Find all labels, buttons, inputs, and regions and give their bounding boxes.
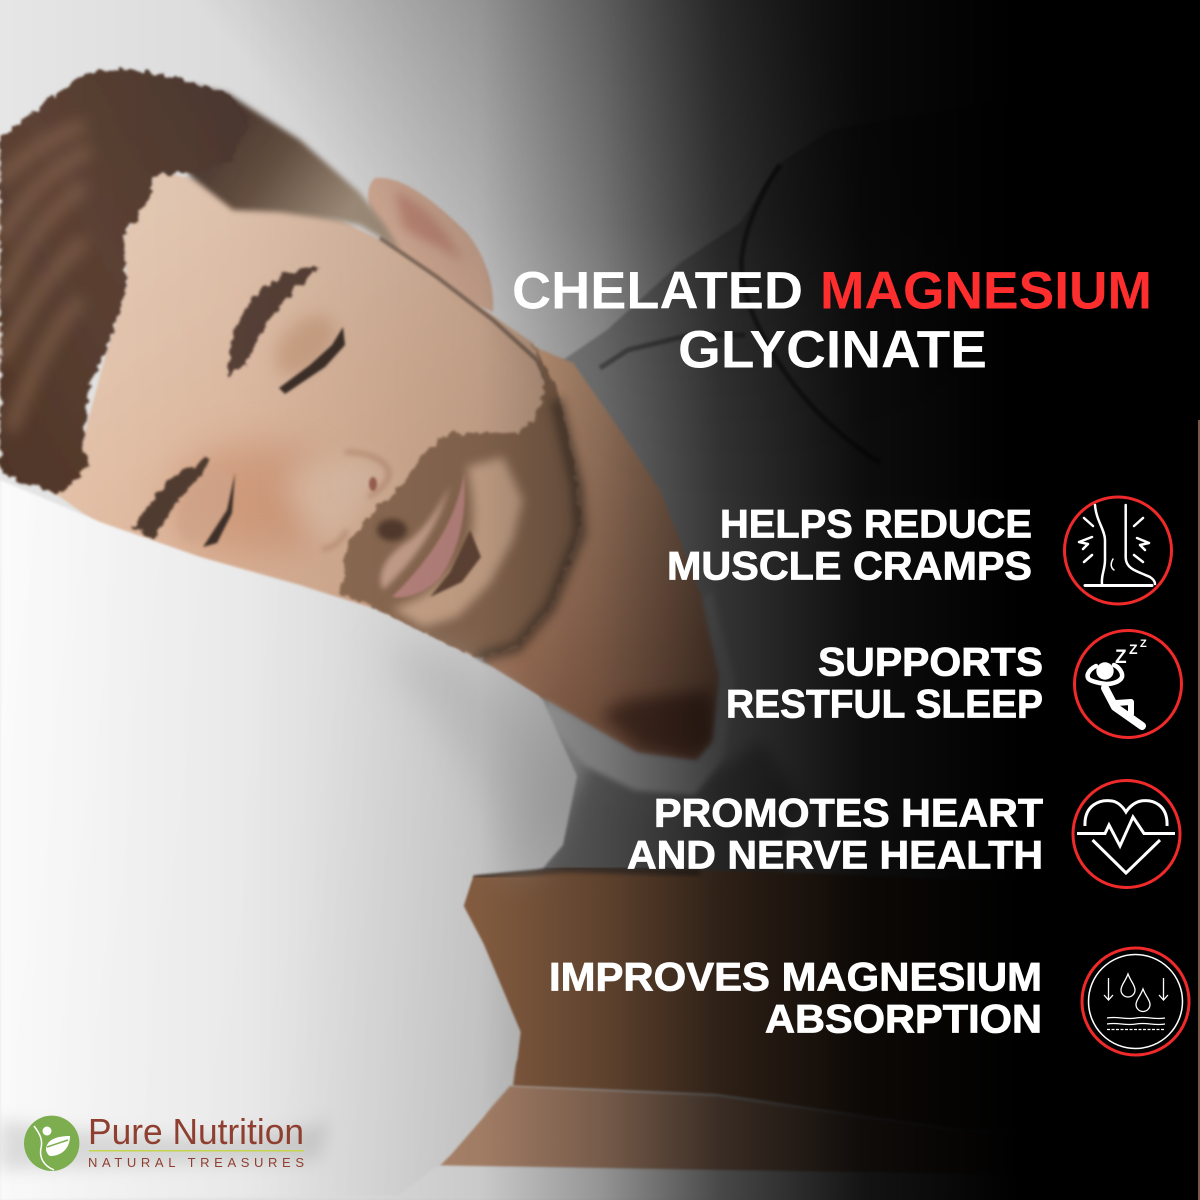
- moustache dark patch: [377, 519, 407, 541]
- ear: [368, 178, 493, 312]
- upper eyebrow: [228, 267, 320, 375]
- icon: sleeping person: [1074, 630, 1182, 738]
- top dark gradient overlay: [238, 0, 884, 338]
- benefit: heart and nerve health: AND NERVE HEALTH: [627, 834, 1043, 878]
- pillow shading: [380, 650, 570, 880]
- lower eye lashes: [203, 473, 235, 547]
- title: [512, 262, 1152, 380]
- icon: sleeping person: Z: [1115, 647, 1127, 668]
- upper eye lashes: [279, 327, 345, 394]
- goatee: [430, 530, 481, 597]
- icon: heart with pulse: [1073, 780, 1180, 888]
- collar band: [545, 590, 735, 795]
- logo divider: [89, 1150, 304, 1152]
- pillow: [0, 480, 577, 1200]
- benefit: restful sleep: [726, 640, 1043, 726]
- nose: [285, 456, 386, 545]
- lower eyebrow: [133, 457, 210, 540]
- nostril: [369, 477, 377, 491]
- beard dark outer edge: [477, 400, 580, 658]
- benefit: muscle cramps: HELPS REDUCE: [720, 502, 1032, 546]
- arm top shadow: [473, 869, 700, 876]
- logo mark: [24, 1116, 79, 1171]
- title word: glycinate: GLYCINATE: [678, 320, 987, 380]
- beard: [340, 343, 580, 658]
- benefit: muscle cramps: [667, 502, 1032, 588]
- logo backdrop shadow: [0, 1120, 330, 1170]
- benefit: restful sleep: SUPPORTS: [818, 640, 1043, 684]
- cheek warm tone: [170, 445, 340, 555]
- icon: absorption drops: [1082, 948, 1189, 1055]
- benefit: heart and nerve health: PROMOTES HEART: [654, 792, 1043, 836]
- right edge sliver: [1198, 420, 1200, 1200]
- nose line: [322, 452, 389, 549]
- icon: sleeping person: Z: [1140, 638, 1147, 650]
- hair: fade: [170, 85, 400, 250]
- upper lip skin: [381, 485, 450, 590]
- chest shadow: [600, 690, 716, 758]
- eyelid lower: [166, 459, 244, 551]
- benefit: restful sleep: RESTFUL SLEEP: [726, 682, 1043, 726]
- benefit: magnesium absorption: ABSORPTION: [765, 998, 1042, 1042]
- icon: foot cramp: [1064, 497, 1172, 604]
- face: [50, 170, 580, 658]
- shirt: [540, 100, 1200, 1000]
- hair: main: [0, 68, 250, 493]
- neck and chest: [483, 345, 720, 761]
- title word: magnesium: MAGNESIUM: [820, 262, 1152, 320]
- chin skin: [392, 457, 523, 627]
- title word: chelated: CHELATED: [512, 262, 803, 320]
- lower arm: [440, 1086, 1200, 1180]
- lips: [392, 473, 465, 598]
- logo name: Pure Nutrition: [88, 1111, 304, 1152]
- sheet at bottom: [0, 1166, 1200, 1200]
- benefit: muscle cramps: MUSCLE CRAMPS: [667, 544, 1032, 588]
- hairline neck edge: [380, 238, 572, 470]
- benefit: magnesium absorption: IMPROVES MAGNESIUM: [549, 956, 1042, 1000]
- hair highlights: [0, 125, 90, 430]
- eye socket shadow upper: [264, 304, 346, 386]
- icon: sleeping person: Z: [1129, 641, 1138, 657]
- logo tagline: NATURAL TREASURES: [88, 1155, 304, 1170]
- benefit: magnesium absorption: [549, 956, 1042, 1042]
- logo: pure nutrition: [24, 1111, 304, 1171]
- arm: [463, 868, 1200, 1140]
- benefit: heart and nerve health: [627, 792, 1043, 878]
